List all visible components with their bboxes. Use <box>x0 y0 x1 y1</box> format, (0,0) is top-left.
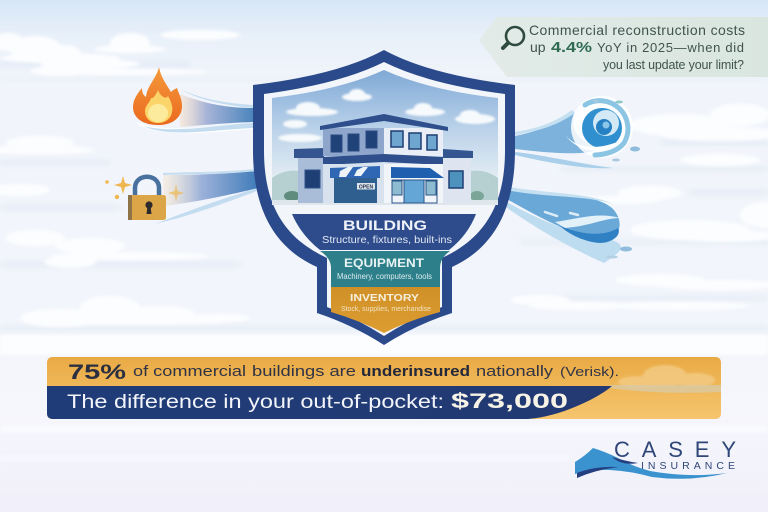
stat line one: buildings are <box>252 363 356 380</box>
left wing <box>298 157 324 203</box>
callout: reconstruction costs: you last update your limit? <box>603 58 744 72</box>
threat: water swirl <box>515 96 640 168</box>
callout: reconstruction costs: up <box>530 39 546 55</box>
stat line two <box>67 390 568 413</box>
fire wind stream <box>135 122 253 133</box>
callout: reconstruction costs: 4.4% <box>551 39 592 56</box>
icon: sparkles <box>105 176 184 202</box>
band: equipment <box>320 251 450 287</box>
stat line one: nationally <box>476 363 554 380</box>
right door and windows <box>392 180 437 203</box>
band: building: BUILDING <box>343 218 427 233</box>
clouds in sky <box>278 89 495 142</box>
building picture <box>272 70 498 205</box>
icon: padlock <box>128 177 166 220</box>
stat line one: (Verisk). <box>560 364 619 379</box>
stat line two: $73,000 <box>451 390 568 413</box>
ground floor <box>323 164 384 203</box>
band: equipment: Machinery, computers, tools <box>337 272 432 281</box>
threat: theft stream and lock icon <box>105 169 258 224</box>
hills <box>272 170 498 200</box>
stat line one <box>68 361 619 384</box>
open sign <box>357 183 375 190</box>
swirl tail <box>515 112 600 153</box>
callout: reconstruction costs <box>479 17 768 77</box>
callout: reconstruction costs: YoY in 2025—when did <box>597 40 744 55</box>
logo: Casey Insurance <box>575 437 736 479</box>
band: inventory: Stock, supplies, merchandise <box>341 304 431 313</box>
banner background <box>47 357 721 419</box>
stat line one: of commercial <box>133 363 246 380</box>
shield outer frame <box>253 50 515 345</box>
wave body <box>503 200 621 263</box>
striped awning <box>330 166 380 178</box>
blue awning <box>391 167 444 178</box>
stat banner <box>47 357 721 419</box>
icon: flame <box>133 67 182 125</box>
upper windows <box>331 131 377 152</box>
shield inner white edge <box>264 62 505 336</box>
band: building: Structure, fixtures, built-ins <box>322 235 452 246</box>
right wing <box>443 157 471 203</box>
shield <box>253 50 515 345</box>
band: inventory: INVENTORY <box>350 292 419 304</box>
band: inventory <box>331 287 440 333</box>
logo: Casey Insurance: CASEY <box>614 437 736 462</box>
threat: fire stream and icon <box>133 67 253 133</box>
upper floor <box>323 128 384 156</box>
logo: Casey Insurance: INSURANCE <box>641 460 735 472</box>
band: building <box>292 214 476 250</box>
building <box>294 114 473 203</box>
icon: magnifier <box>503 27 524 48</box>
open sign: OPEN <box>359 184 373 190</box>
stat line two: The difference in your out-of-pocket: <box>67 392 444 413</box>
band: equipment: EQUIPMENT <box>344 256 425 270</box>
swirl head <box>565 96 633 158</box>
middle band <box>323 154 443 165</box>
left door area <box>334 178 377 203</box>
stat line one: underinsured <box>361 363 470 380</box>
logo mountain and wave mark <box>575 448 727 479</box>
stat line one: 75% <box>68 361 126 384</box>
callout: reconstruction costs: Commercial reconstruction costs <box>529 22 745 38</box>
theft wind stream <box>155 169 257 224</box>
threat: water wave <box>503 186 632 263</box>
